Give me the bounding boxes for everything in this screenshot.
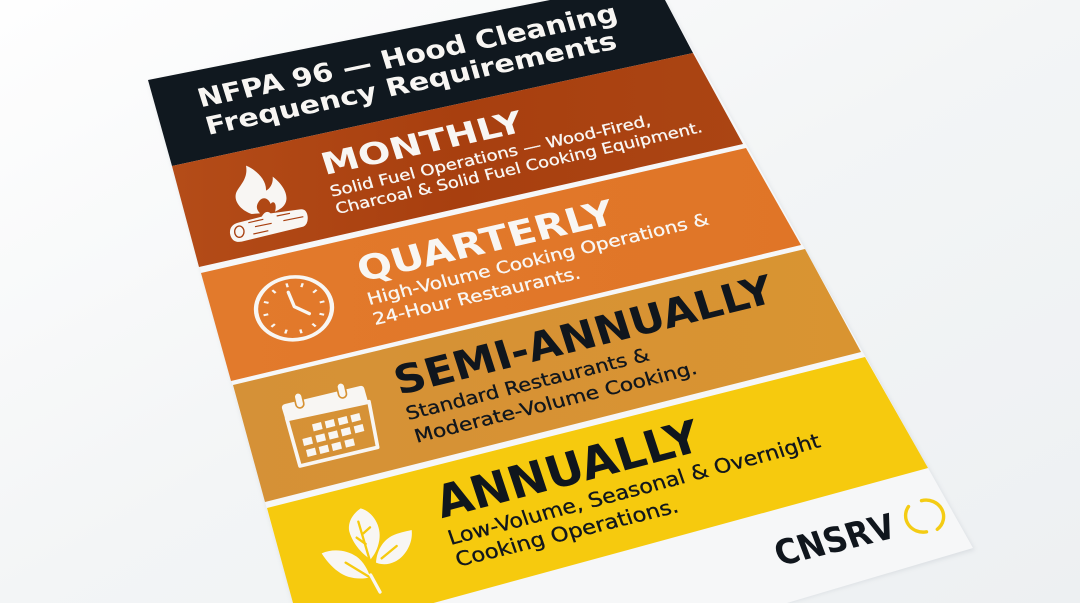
poster sheet	[148, 0, 973, 603]
panel: title banner	[148, 0, 693, 166]
title: Frequency Requirements	[202, 26, 620, 141]
text: quarterly description	[365, 209, 711, 329]
text: quarterly description: 24-Hour Restaurants.	[370, 263, 583, 329]
poster shadow	[149, 2, 975, 603]
text: semi-annually description: Moderate-Volume Cooking.	[412, 358, 700, 448]
text: semi-annually description: Standard Restaurants &	[403, 344, 652, 425]
icon: flame on log	[230, 166, 308, 242]
logo: CNSRV	[769, 500, 944, 575]
text: annually description: Low-Volume, Seasonal & Overnight	[445, 429, 824, 550]
icon: leaves	[322, 508, 412, 592]
panel: semi-annually	[233, 249, 861, 502]
text: monthly description: Charcoal & Solid Fuel Cooking Equipment.	[333, 119, 704, 218]
text: semi-annually description	[403, 344, 700, 448]
text: monthly description: Solid Fuel Operations — Wood-Fired,	[328, 112, 653, 201]
logo ring	[906, 500, 944, 532]
heading: monthly: MONTHLY	[317, 105, 528, 183]
heading: annually: ANNUALLY	[429, 411, 708, 529]
title: NFPA 96 — Hood Cleaning	[194, 0, 621, 113]
panel: monthly	[172, 53, 743, 267]
text: monthly description	[328, 112, 704, 218]
icon: calendar	[282, 382, 378, 466]
text: annually description	[445, 429, 824, 572]
logo wordmark: CNSRV	[769, 507, 902, 575]
title	[194, 0, 621, 141]
text: quarterly description: High-Volume Cooking Operations &	[365, 209, 711, 309]
panel: annually	[267, 357, 928, 603]
text: annually description: Cooking Operations.	[452, 494, 682, 572]
heading: semi-annually: SEMI-ANNUALLY	[388, 267, 780, 405]
heading: quarterly: QUARTERLY	[352, 193, 620, 289]
panel: quarterly	[201, 148, 801, 381]
calendar day grid	[302, 413, 364, 457]
icon: clock	[248, 270, 340, 347]
